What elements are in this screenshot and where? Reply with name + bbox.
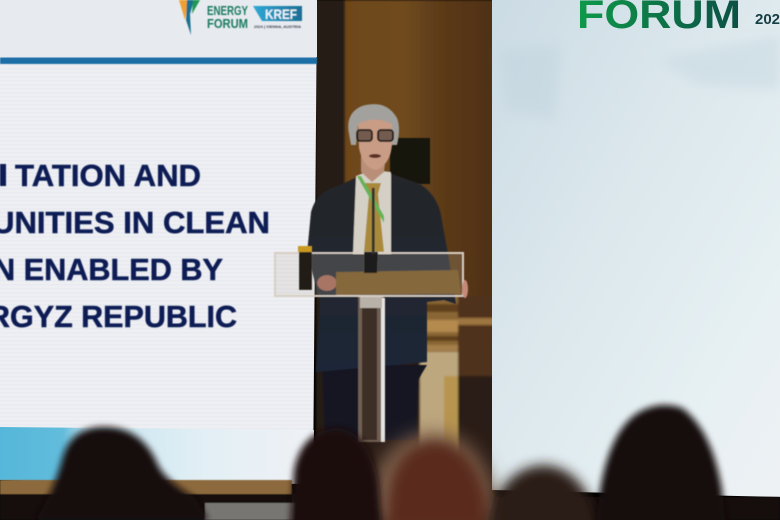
left projection screen xyxy=(0,0,317,484)
head 3 halo xyxy=(372,432,498,520)
logo name xyxy=(207,4,249,31)
slide title: TATION AND xyxy=(15,158,201,193)
lectern xyxy=(275,188,468,442)
slide title xyxy=(0,158,270,334)
hand xyxy=(317,275,337,291)
logo name: ENERGY xyxy=(207,4,249,18)
jacket xyxy=(307,174,456,372)
slide title: UNITIES IN CLEAN xyxy=(0,205,270,240)
head 4 xyxy=(488,465,600,520)
head 2 xyxy=(290,428,382,520)
trousers xyxy=(322,365,427,440)
face xyxy=(358,120,392,170)
bottle xyxy=(299,246,312,290)
slide header strip xyxy=(0,0,317,57)
slide header rule xyxy=(0,58,317,64)
KREF badge: KREF xyxy=(265,6,297,22)
shirt xyxy=(353,170,391,254)
logo name: FORUM xyxy=(207,17,248,31)
KREF badge xyxy=(253,6,302,29)
slide bottom band xyxy=(0,427,314,484)
lectern column xyxy=(358,296,384,442)
tie xyxy=(364,183,384,252)
screen year: 202 xyxy=(755,11,780,28)
faded screen texture xyxy=(500,35,780,120)
head 5 xyxy=(596,405,726,520)
head 3 xyxy=(386,442,488,520)
back wall xyxy=(316,0,495,510)
KREF badge: 2024 | VIENNA, AUSTRIA xyxy=(254,24,301,29)
wall loudspeaker xyxy=(390,138,430,184)
audience silhouettes xyxy=(36,405,726,520)
wood reading board xyxy=(336,270,461,295)
hair xyxy=(348,104,399,145)
stage edge xyxy=(0,480,780,520)
head 1 xyxy=(36,427,208,520)
glass top xyxy=(275,253,463,296)
mouth xyxy=(369,154,381,158)
lanyard xyxy=(357,176,384,223)
slide logo xyxy=(179,0,302,35)
logo flame icon xyxy=(179,0,200,35)
speaker xyxy=(307,104,456,440)
neck xyxy=(361,155,386,182)
glasses xyxy=(357,130,393,141)
right projection screen xyxy=(492,0,780,497)
microphone xyxy=(364,252,378,273)
